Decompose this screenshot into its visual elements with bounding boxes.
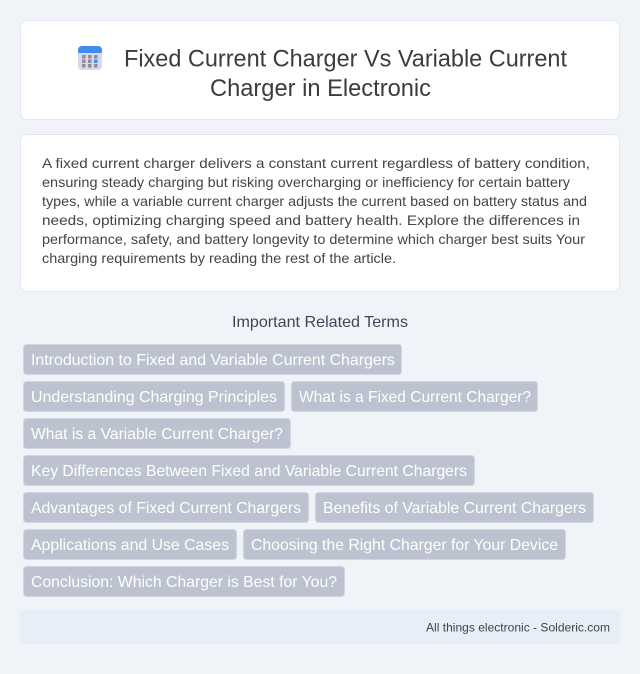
tag: applications bbox=[24, 530, 236, 560]
tag: benefits bbox=[316, 492, 594, 522]
tag: benefits: Benefits of Variable Current Chargers bbox=[323, 500, 586, 517]
text block: summary bbox=[42, 155, 590, 266]
tag: key differences bbox=[24, 456, 474, 486]
tag: advantages bbox=[24, 492, 308, 522]
tag: introduction bbox=[24, 344, 402, 374]
tag: applications: Applications and Use Cases bbox=[31, 537, 229, 554]
text block: summary: A fixed current charger delivers a constant current regardless of battery condition, bbox=[42, 155, 590, 171]
panel: title card bbox=[20, 20, 620, 120]
tag: introduction: Introduction to Fixed and Variable Current Chargers bbox=[31, 352, 395, 369]
icon: calendar grid bbox=[78, 46, 102, 70]
tag: conclusion: Conclusion: Which Charger is Best for You? bbox=[31, 574, 337, 591]
tag: key differences: Key Differences Between Fixed and Variable Current Chargers bbox=[31, 463, 467, 480]
tag: principles bbox=[24, 382, 284, 412]
panel: related term tags bbox=[24, 344, 594, 596]
tag: conclusion bbox=[24, 566, 344, 596]
tag: choosing: Choosing the Right Charger for Your Device bbox=[251, 537, 558, 554]
tag: variable charger bbox=[24, 418, 290, 448]
tag: choosing bbox=[244, 530, 566, 560]
text block: summary: ensuring steady charging but risking overcharging or inefficiency for certain battery bbox=[42, 174, 570, 190]
footer bar bbox=[20, 610, 620, 644]
heading bbox=[124, 46, 567, 102]
heading: Charger in Electronic bbox=[210, 75, 431, 102]
panel: intro paragraph bbox=[20, 134, 620, 292]
text block: summary: performance, safety, and battery longevity to determine which charger best suits Your bbox=[42, 231, 585, 247]
footer bar: All things electronic - Solderic.com bbox=[426, 620, 610, 634]
tag: fixed charger: What is a Fixed Current Charger? bbox=[299, 389, 531, 406]
tag: advantages: Advantages of Fixed Current Chargers bbox=[31, 500, 301, 517]
heading: Fixed Current Charger Vs Variable Current bbox=[124, 46, 567, 72]
text block: summary: types, while a variable current charger adjusts the current based on battery status and bbox=[42, 193, 587, 209]
heading: important related terms: Important Related Terms bbox=[232, 314, 408, 331]
tag: principles: Understanding Charging Principles bbox=[31, 389, 277, 406]
text block: summary: needs, optimizing charging speed and battery health. Explore the differences in bbox=[42, 212, 580, 228]
tag: fixed charger bbox=[292, 382, 538, 412]
tag: variable charger: What is a Variable Current Charger? bbox=[31, 426, 283, 443]
text block: summary: charging requirements by reading the rest of the article. bbox=[42, 250, 396, 266]
